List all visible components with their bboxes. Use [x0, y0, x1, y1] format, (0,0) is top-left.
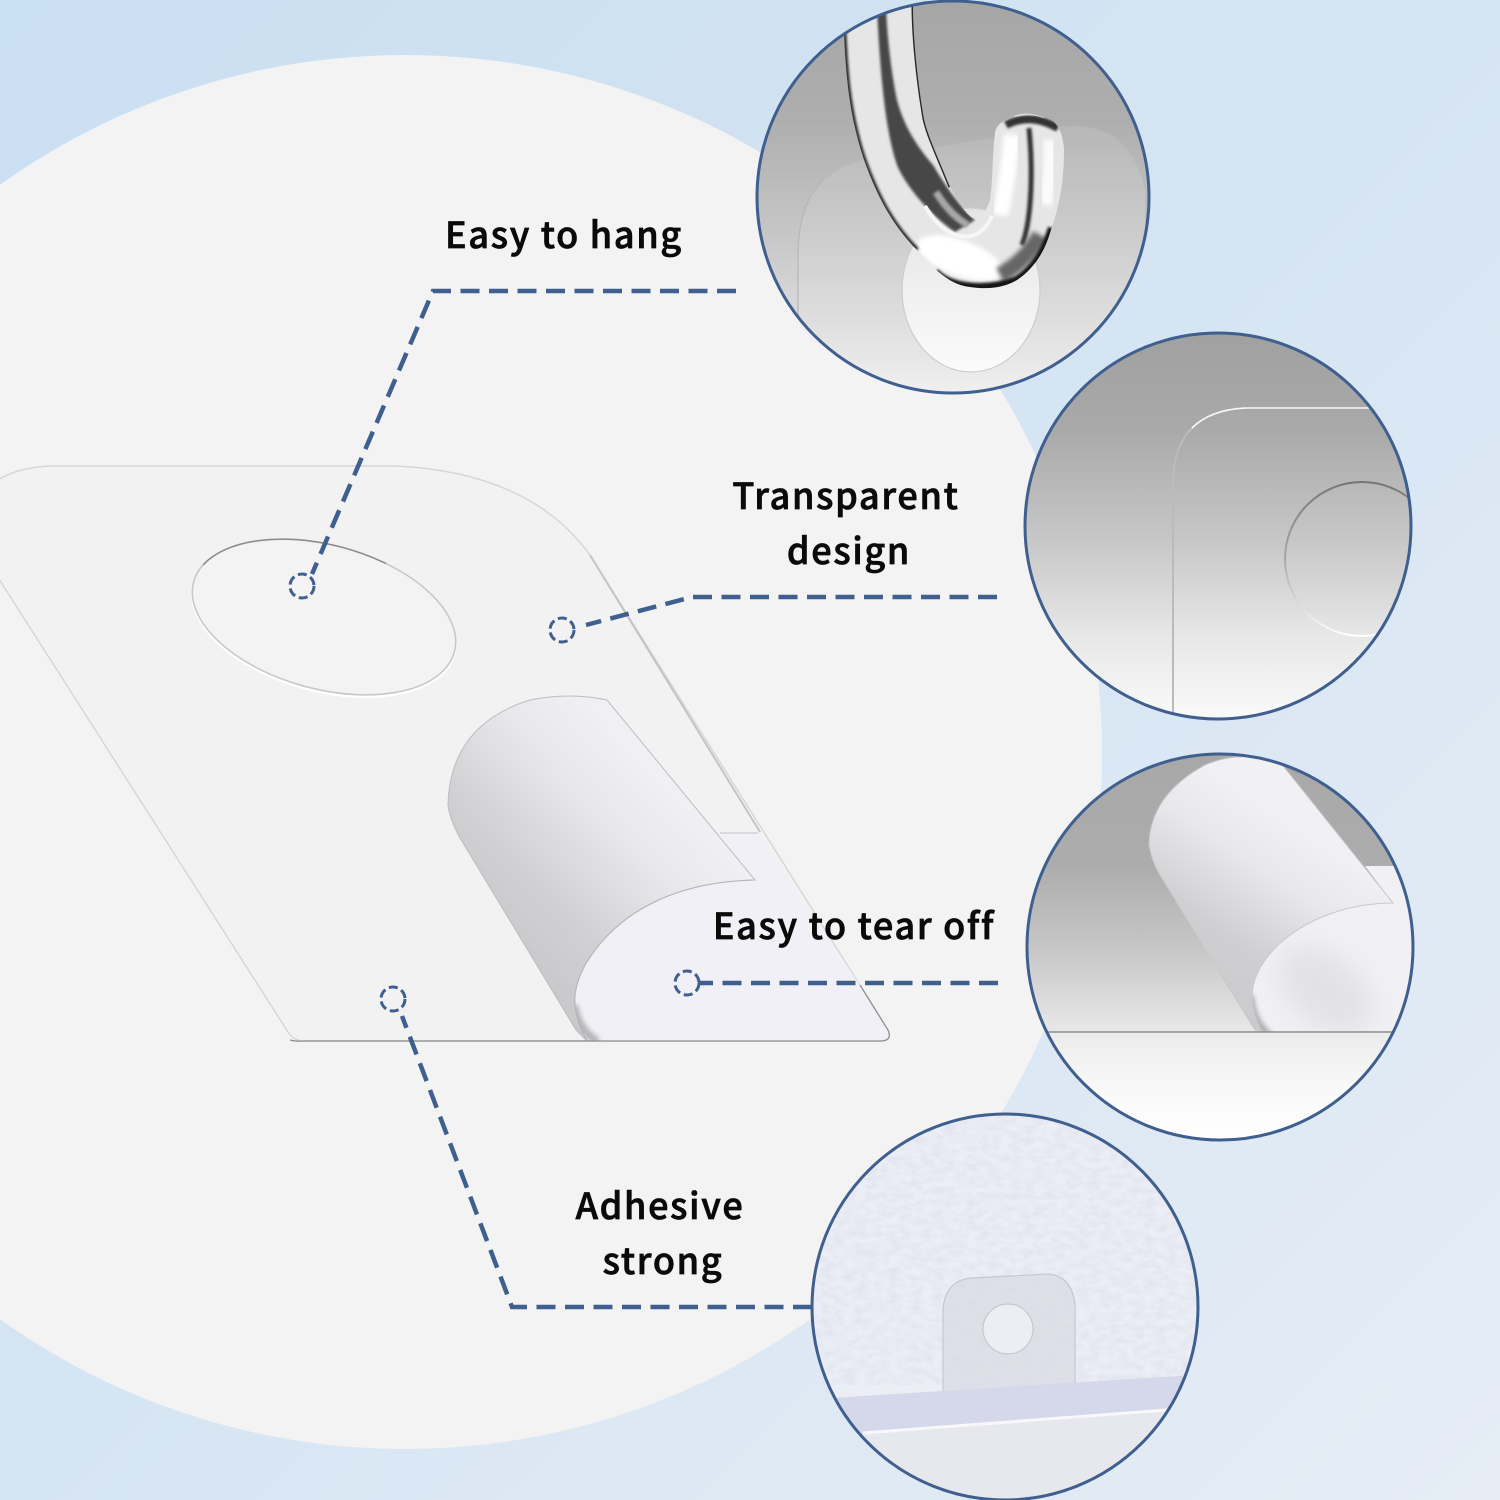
exposed backing sheet: [575, 833, 891, 1041]
leader line: transparent design: [550, 597, 997, 642]
clear tab on wall: [943, 1274, 1075, 1395]
tab behind hook: [797, 126, 1146, 315]
peeled corner curl: [448, 696, 755, 1041]
leader line: adhesive strong: [381, 987, 812, 1307]
shelf edge: [836, 1376, 1184, 1434]
leader line: easy to hang: [290, 291, 736, 598]
detail circle: peeled backing: [1020, 750, 1420, 1152]
hanging hole ring: [175, 513, 473, 723]
label: Transparent design: Transparent: [732, 468, 960, 520]
leader line: easy to tear off: [675, 971, 998, 995]
round hole: [902, 208, 1040, 372]
product: transparent adhesive tab: [0, 466, 891, 1042]
label: Easy to hang: Easy to hang: [445, 207, 683, 259]
detail circle: tab on textured wall: [800, 1100, 1210, 1500]
detail circle: hook on tab: [750, 0, 1160, 400]
label: Adhesive strong: Adhesive: [576, 1178, 744, 1230]
label: Adhesive strong: strong: [603, 1233, 723, 1285]
label: Easy to tear off: Easy to tear off: [713, 898, 995, 950]
metal hook: [844, 6, 1064, 288]
bottom and right edge outline: [290, 985, 889, 1041]
large pale circle backdrop: [0, 55, 1102, 1449]
label: Transparent design: design: [787, 523, 911, 575]
detail circle: transparent corner: [1020, 330, 1439, 725]
